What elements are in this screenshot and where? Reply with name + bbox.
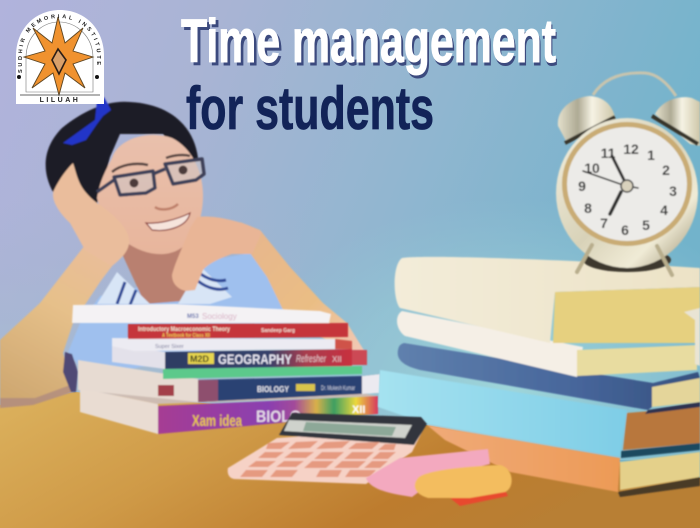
book: biology: BIOLOGY (257, 384, 289, 394)
hands (583, 156, 638, 214)
book: biology (78, 360, 380, 402)
right hand (172, 217, 262, 291)
hair ribbon (63, 97, 111, 145)
cream top book (395, 257, 700, 343)
white book (397, 311, 697, 377)
white thin book: Super Sixer (155, 344, 184, 350)
numerals: 3 (669, 183, 677, 199)
logo: Sudhir Memorial Institute Liluah (16, 10, 104, 104)
numerals: 1 (647, 147, 655, 163)
handle (593, 73, 676, 96)
case (583, 248, 671, 272)
alarm clock (556, 73, 700, 275)
highlighter markers (366, 449, 512, 506)
numerals: 5 (642, 217, 650, 233)
numerals: 6 (621, 222, 629, 238)
calculator keys (240, 441, 396, 477)
nose (155, 204, 178, 209)
smile (146, 213, 190, 230)
numerals: 8 (584, 200, 592, 216)
right arm (240, 222, 365, 352)
book: geography: XII (332, 355, 342, 364)
logo arc text: SUDHIR MEMORIAL INSTITUTE (18, 14, 101, 73)
top white book: M53 (187, 314, 199, 320)
right book stack (378, 257, 700, 497)
neck (118, 240, 195, 304)
collar stripes (117, 272, 228, 305)
numerals: 7 (600, 215, 608, 231)
top white book: Sociology (202, 312, 237, 321)
left collar (97, 272, 150, 304)
cup edge at right (684, 308, 700, 366)
book: geography (112, 344, 367, 369)
face (567, 127, 687, 241)
student girl (0, 97, 365, 408)
left hand (53, 163, 129, 266)
left bell (558, 96, 615, 143)
top white book (72, 304, 331, 323)
teal book (378, 370, 700, 458)
book: macroeconomic theory red: Sandeep Garg (261, 328, 295, 334)
feet (577, 245, 672, 275)
book: biology: Dr. Mukesh Kumar (321, 385, 356, 392)
left forearm (0, 245, 128, 408)
elbow sleeve (63, 352, 78, 392)
book: geography: GEOGRAPHY (218, 351, 293, 367)
marker tip (450, 490, 508, 506)
numerals: 10 (584, 160, 600, 176)
title line 2: for students (186, 75, 434, 142)
shirt (68, 253, 284, 380)
book: macroeconomic theory red: A Textbook for Class XII (162, 333, 211, 339)
green strip book (163, 366, 362, 379)
table surface (0, 392, 700, 528)
numerals: 11 (601, 145, 616, 161)
right collar (178, 266, 232, 304)
glasses (97, 159, 204, 195)
numerals: 2 (662, 162, 670, 178)
eyebrows (112, 155, 190, 172)
yellow marker (415, 465, 512, 498)
logo star (24, 17, 93, 95)
eyes (130, 166, 188, 188)
book: geography: Refresher (296, 354, 326, 365)
white thin book (112, 338, 352, 351)
numerals: 4 (660, 202, 668, 218)
numerals: 12 (623, 141, 639, 157)
book: macroeconomic theory red (128, 323, 348, 339)
book: biology xam idea: Xam idea (192, 413, 242, 430)
logo bottom text: LILUAH (40, 97, 80, 104)
student book stack (72, 304, 380, 434)
calculator (228, 413, 427, 484)
face (97, 135, 203, 254)
logo center diamond (52, 49, 66, 74)
right bell (652, 97, 700, 146)
book: biology xam idea: XII (352, 404, 365, 416)
pink marker (366, 449, 490, 497)
book: biology xam idea: BIOLO (256, 407, 301, 426)
book: biology xam idea (80, 382, 378, 434)
numerals: 9 (578, 178, 586, 194)
book: macroeconomic theory red: Introductory Macroeconomic Theory (138, 326, 230, 333)
numerals (578, 141, 677, 238)
arm shadow at table (0, 384, 73, 408)
navy book (398, 343, 700, 414)
book: geography: M2D (190, 354, 210, 364)
hair (46, 102, 198, 214)
orange bottom book (427, 425, 700, 497)
title line 1: Time management (181, 7, 556, 75)
